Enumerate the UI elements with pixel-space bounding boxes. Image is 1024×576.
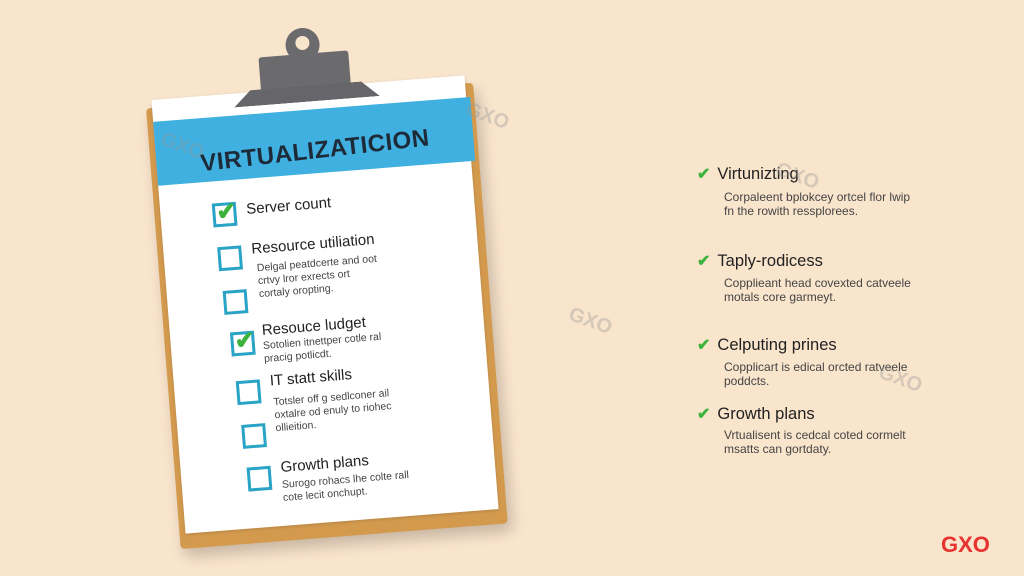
item: server count — [212, 194, 332, 228]
item: growth plans: Growth plans — [280, 452, 369, 476]
logo: GXO — [941, 532, 990, 557]
text: GXO — [773, 158, 822, 194]
right list: fn the rowith ressplorees. — [724, 204, 858, 218]
item: growth plans: cote lecit onchupt. — [283, 485, 368, 504]
item: resource utilization: crtvy lror exrects ort — [257, 268, 350, 287]
right list: Vrtualisent is cedcal coted cormelt — [724, 428, 906, 442]
clip — [234, 28, 380, 108]
item: growth plans: Surogo rohacs lhe colte rall — [282, 469, 409, 491]
right list: Copplieant head covexted catveele — [724, 276, 911, 290]
right list: poddcts. — [724, 374, 769, 388]
header band — [153, 97, 475, 186]
item: resource utilization: cortaly oropting. — [259, 282, 334, 300]
item: growth plans — [246, 452, 409, 504]
item: resource budget — [230, 314, 382, 365]
text: GXO — [876, 361, 925, 397]
item: IT staff skills: IT statt skills — [269, 366, 353, 390]
item: resource budget: Resouce ludget — [261, 314, 366, 339]
board — [146, 83, 508, 549]
item: resource budget: ✔ — [234, 327, 256, 355]
item: IT staff skills: Totsler off g sedlconer ail — [273, 387, 390, 408]
item: server count: Server count — [246, 194, 332, 218]
right list: Corpaleent bplokcey ortcel flor lwip — [724, 190, 910, 204]
item 3: ✔ Celputing prines — [697, 336, 837, 354]
item: resource budget: pracig potlicdt. — [264, 348, 332, 365]
item: resource utilization — [217, 231, 377, 315]
right list: motals core garmeyt. — [724, 290, 836, 304]
watermarks: GXO — [463, 98, 512, 134]
text: GXO — [158, 128, 207, 164]
right list — [697, 165, 911, 456]
paper — [151, 75, 499, 534]
item: resource utilization: Delgal peatdcerte and oot — [256, 253, 377, 274]
item 1: ✔ Virtunizting — [697, 165, 799, 183]
item: IT staff skills — [236, 366, 392, 449]
item: IT staff skills: oxtalre od enuly to riohec — [274, 400, 392, 421]
item 2: ✔ Taply-rodicess — [697, 252, 823, 270]
item: resource utilization: Resource utiliation — [251, 231, 375, 258]
item 4: ✔ Growth plans — [697, 405, 815, 423]
item: resource budget: Sotolien itnettper cotle ral — [263, 331, 382, 352]
text: GXO — [566, 303, 615, 339]
right list: msatts can gortdaty. — [724, 442, 831, 456]
title: VIRTUALIZATICION — [199, 124, 431, 177]
clipboard — [146, 28, 518, 562]
item: server count: ✔ — [215, 198, 238, 226]
item: IT staff skills: ollieition. — [275, 419, 317, 434]
right list: Copplicart is edical orcted ratveele — [724, 360, 907, 374]
